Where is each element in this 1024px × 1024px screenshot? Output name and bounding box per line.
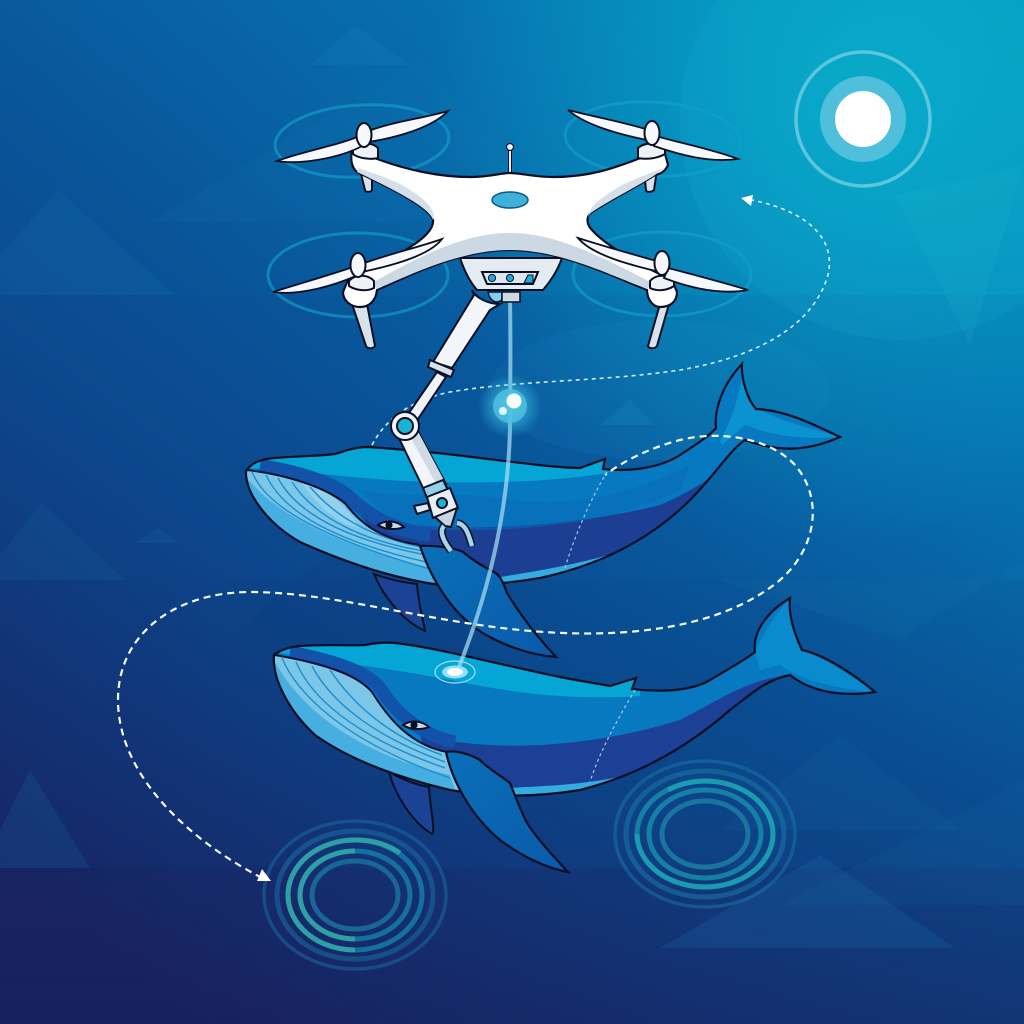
thin dotted scan line on whale one bbox=[565, 472, 607, 568]
whale one pectoral fin bbox=[420, 546, 556, 657]
arrowhead near left ripple bbox=[257, 869, 271, 881]
propeller hubs bbox=[350, 121, 670, 277]
antenna bbox=[506, 144, 514, 176]
waist shading right bbox=[588, 168, 664, 220]
waist shading left bbox=[357, 168, 434, 220]
drone bbox=[273, 110, 748, 348]
whale two pectoral fin bbox=[446, 751, 568, 872]
motor collars bbox=[349, 144, 674, 290]
light beam bbox=[457, 302, 510, 672]
whale one bbox=[230, 364, 840, 657]
sonar ripple left bbox=[264, 821, 446, 969]
dotted flight path to sun bbox=[372, 200, 829, 445]
drone body shading bbox=[372, 233, 652, 289]
whale one rear fin bbox=[374, 574, 425, 631]
sun bbox=[796, 52, 930, 186]
thin dotted scan line on whale two bbox=[590, 690, 635, 782]
sample bubble bbox=[478, 374, 542, 438]
whale two outline bbox=[274, 598, 875, 796]
arrowhead near sun bbox=[741, 195, 753, 206]
whale two bbox=[260, 598, 875, 872]
whale one outline bbox=[246, 364, 840, 585]
whale one eye bbox=[378, 521, 404, 529]
propeller blades bbox=[273, 110, 748, 293]
beam impact ripple bbox=[435, 661, 475, 683]
rotor rings bbox=[268, 97, 751, 317]
whale one mouth line bbox=[247, 470, 420, 545]
sonar ripple right bbox=[615, 761, 795, 907]
whale two eye bbox=[403, 721, 429, 729]
gimbal housing bbox=[460, 258, 562, 302]
drone legs bbox=[352, 170, 669, 348]
whale two rear fin bbox=[389, 772, 433, 834]
whale two mouth line bbox=[275, 655, 447, 752]
drone body bbox=[343, 150, 677, 307]
dashed migration path bbox=[118, 436, 813, 878]
robotic arm bbox=[391, 290, 500, 551]
status light bbox=[492, 192, 528, 208]
